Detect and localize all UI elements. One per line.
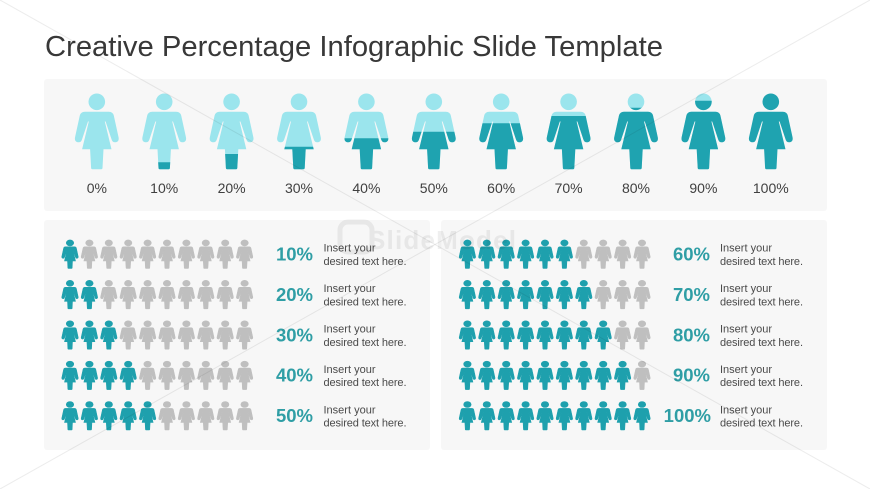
figure: 100% xyxy=(749,94,793,196)
figure: 20% xyxy=(210,94,254,196)
row: 90%: desired text here. xyxy=(720,377,803,389)
figure: 30% xyxy=(277,94,321,196)
figure: 40% xyxy=(344,94,388,196)
row: 80%: desired text here. xyxy=(720,337,803,349)
row: 50%: Insert your xyxy=(324,404,376,416)
row: 40% xyxy=(62,361,407,390)
row: 30% xyxy=(62,321,407,349)
figure: 30%: 30% xyxy=(285,180,313,196)
row: 80%: 80% xyxy=(673,324,710,345)
title: Creative Percentage Infographic Slide Template xyxy=(45,31,663,63)
panel: 60% to 100% rows xyxy=(441,220,827,450)
figure: 0% xyxy=(75,94,119,196)
figure: 90% xyxy=(681,94,725,196)
row: 70% xyxy=(459,280,803,309)
row: 20%: Insert your xyxy=(324,283,376,295)
row: 50% xyxy=(62,402,407,430)
row: 20%: 20% xyxy=(276,284,313,305)
row: 60%: desired text here. xyxy=(720,256,803,268)
row: 30%: Insert your xyxy=(324,324,376,336)
row: 80% xyxy=(459,321,803,349)
figure: 100%: 100% xyxy=(753,180,789,196)
row: 20%: desired text here. xyxy=(324,296,406,308)
panel: top pictogram scale xyxy=(74,94,793,193)
figure: 60%: 60% xyxy=(487,180,515,196)
row: 20% xyxy=(62,280,407,309)
figure: 40%: 40% xyxy=(352,180,380,196)
figure: 50%: 50% xyxy=(420,180,448,196)
panel: 10% to 50% rows xyxy=(44,220,430,450)
figure: 20%: 20% xyxy=(218,180,246,196)
row: 10%: 10% xyxy=(276,244,313,264)
row: 10%: desired text here. xyxy=(324,256,406,268)
figure: 10% xyxy=(142,94,186,196)
row: 40%: desired text here. xyxy=(324,377,406,389)
watermark: SlideModel xyxy=(368,225,516,255)
figure: 70% xyxy=(547,94,591,196)
row: 100% xyxy=(459,402,803,430)
row: 70%: Insert your xyxy=(720,283,772,295)
row: 10% xyxy=(62,240,407,268)
row: 60%: Insert your xyxy=(720,243,772,255)
row: 90%: Insert your xyxy=(720,364,772,376)
row: 70%: 70% xyxy=(673,284,710,305)
figure: 10%: 10% xyxy=(150,180,178,196)
row: 40%: 40% xyxy=(276,365,313,386)
row: 60%: 60% xyxy=(673,244,710,264)
row: 100%: desired text here. xyxy=(720,418,803,430)
row: 40%: Insert your xyxy=(324,364,376,376)
row: 80%: Insert your xyxy=(720,324,772,336)
row: 100%: 100% xyxy=(664,405,711,426)
row: 10%: Insert your xyxy=(324,243,376,255)
row: 30%: 30% xyxy=(276,324,313,345)
row: 60% xyxy=(459,240,803,268)
figure: 50% xyxy=(412,94,456,196)
figure: 60% xyxy=(479,94,523,196)
row: 50%: 50% xyxy=(276,405,313,426)
figure: 70%: 70% xyxy=(555,180,583,196)
row: 50%: desired text here. xyxy=(324,418,406,430)
row: 30%: desired text here. xyxy=(324,337,406,349)
figure: 90%: 90% xyxy=(689,180,717,196)
row: 90% xyxy=(459,361,803,390)
figure: 80% xyxy=(614,94,658,196)
row: 100%: Insert your xyxy=(720,404,772,416)
figure: 80%: 80% xyxy=(622,180,650,196)
row: 70%: desired text here. xyxy=(720,296,803,308)
row: 90%: 90% xyxy=(673,365,710,386)
figure: 0%: 0% xyxy=(87,180,107,196)
